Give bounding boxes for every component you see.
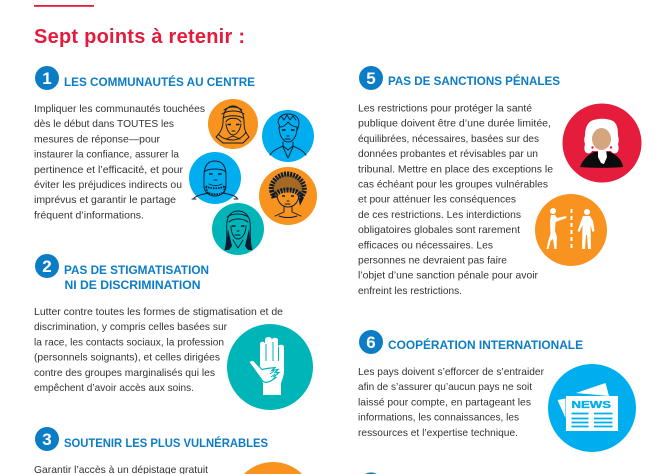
icon: woman with long hair xyxy=(212,203,264,255)
panel: point 5 xyxy=(358,66,642,297)
text block 5: cas échéant pour les groupes vulnérables xyxy=(358,180,548,190)
badge 3: 3 xyxy=(42,430,52,449)
text block 5: personnes ne devraient pas faire xyxy=(358,256,507,266)
text block 5: équilibrées, nécessaires, basées sur des xyxy=(358,134,539,145)
text block 2: discrimination, y compris celles basées sur xyxy=(34,322,228,333)
icon: bearded man xyxy=(189,152,241,204)
icon: physical distancing xyxy=(535,194,607,266)
text block 5: l’objet d’une sanction pénale pour avoir xyxy=(358,271,539,282)
panel: point 2 xyxy=(34,254,313,410)
panel: point 6 xyxy=(358,330,636,452)
badge 3 xyxy=(35,427,59,451)
title: Sept points à retenir : xyxy=(34,26,245,48)
text block 1: pertinence et l’efficacité, et pour xyxy=(34,165,184,176)
panel: point 3 xyxy=(34,427,302,474)
text block 6: laissé pour compte, en partageant les xyxy=(358,397,531,408)
icon: woman with headscarf xyxy=(208,99,258,149)
text block 6: Les pays doivent s’efforcer de s’entraider xyxy=(358,367,545,378)
text block 2: Lutter contre toutes les formes de stigmatisation et de xyxy=(34,307,283,318)
text block 5: Les restrictions pour protéger la santé xyxy=(358,104,532,114)
badge 6 xyxy=(359,330,383,354)
text block 1 xyxy=(34,104,205,221)
panel: point 1 xyxy=(34,66,317,255)
badge 5: 5 xyxy=(366,69,376,88)
text block 1: dès le début dans TOUTES les xyxy=(34,119,174,130)
text block 2: contre des groupes marginalisés qui les xyxy=(34,368,215,379)
text block 1: mesures de réponse—pour xyxy=(34,134,161,145)
badge 1: 1 xyxy=(42,69,52,88)
text block 5 xyxy=(358,104,553,297)
text block 5: efficaces ou nécessaires. Les xyxy=(358,240,493,251)
text block 1: instaurer la confiance, assurer la xyxy=(34,150,179,161)
text block 5: obligatoires globales sont rarement xyxy=(358,225,520,236)
icon: woman with curly hair xyxy=(259,167,317,225)
heading 1: LES COMMUNAUTÉS AU CENTRE xyxy=(64,74,255,89)
badge 1 xyxy=(35,66,59,90)
heading 5: PAS DE SANCTIONS PÉNALES xyxy=(388,73,560,88)
badge 7, cropped xyxy=(365,473,377,474)
icon: judge xyxy=(562,104,642,182)
text block 6: afin de s’assurer qu’aucun pays ne soit xyxy=(358,382,532,393)
text block 5: données probantes et révisables par un xyxy=(358,149,538,160)
badge 5 xyxy=(359,66,383,90)
text block 5: et pour atténuer les conséquences xyxy=(358,195,516,206)
heading 2: NI DE DISCRIMINATION xyxy=(64,278,200,292)
heading 3: SOUTENIR LES PLUS VULNÉRABLES xyxy=(64,435,268,450)
text block 6: informations, les connaissances, les xyxy=(358,413,519,424)
text block 2 xyxy=(34,307,283,394)
icon: helping hands xyxy=(227,324,313,410)
text block 5: publique doivent être d’une durée limitée, xyxy=(358,119,551,130)
icon: young man xyxy=(262,110,314,162)
text block 1: fréquent d’informations. xyxy=(34,210,144,221)
text block 1: éviter les préjudices indirects ou xyxy=(34,180,182,191)
heading 6: COOPÉRATION INTERNATIONALE xyxy=(388,337,583,352)
text block 6: ressources et l’expertise technique. xyxy=(358,428,518,439)
text block 5: de ces restrictions. Les interdictions xyxy=(358,210,521,221)
badge 2: 2 xyxy=(42,257,52,276)
heading 2 xyxy=(64,263,209,292)
text block 2: la race, les contacts sociaux, la profession xyxy=(34,337,224,348)
text block 1: imprévus et garantir le partage xyxy=(34,195,176,206)
badge 2 xyxy=(35,254,59,278)
icon: newspaper xyxy=(548,364,636,452)
badge 6: 6 xyxy=(366,333,376,352)
text block 1: Impliquer les communautés touchées xyxy=(34,104,205,115)
icon: newspaper: NEWS xyxy=(572,399,611,411)
text block 5: tribunal. Mettre en place des exceptions le xyxy=(358,164,553,175)
heading 2: PAS DE STIGMATISATION xyxy=(64,263,209,277)
text block 2: (personnels soignants), et celles dirigées xyxy=(34,353,220,364)
text block 5: enfreint les restrictions. xyxy=(358,286,462,297)
text block 6 xyxy=(358,367,545,439)
icon: orange circle, cropped xyxy=(244,462,302,474)
text block 2: empêchent d’avoir accès aux soins. xyxy=(34,383,194,394)
